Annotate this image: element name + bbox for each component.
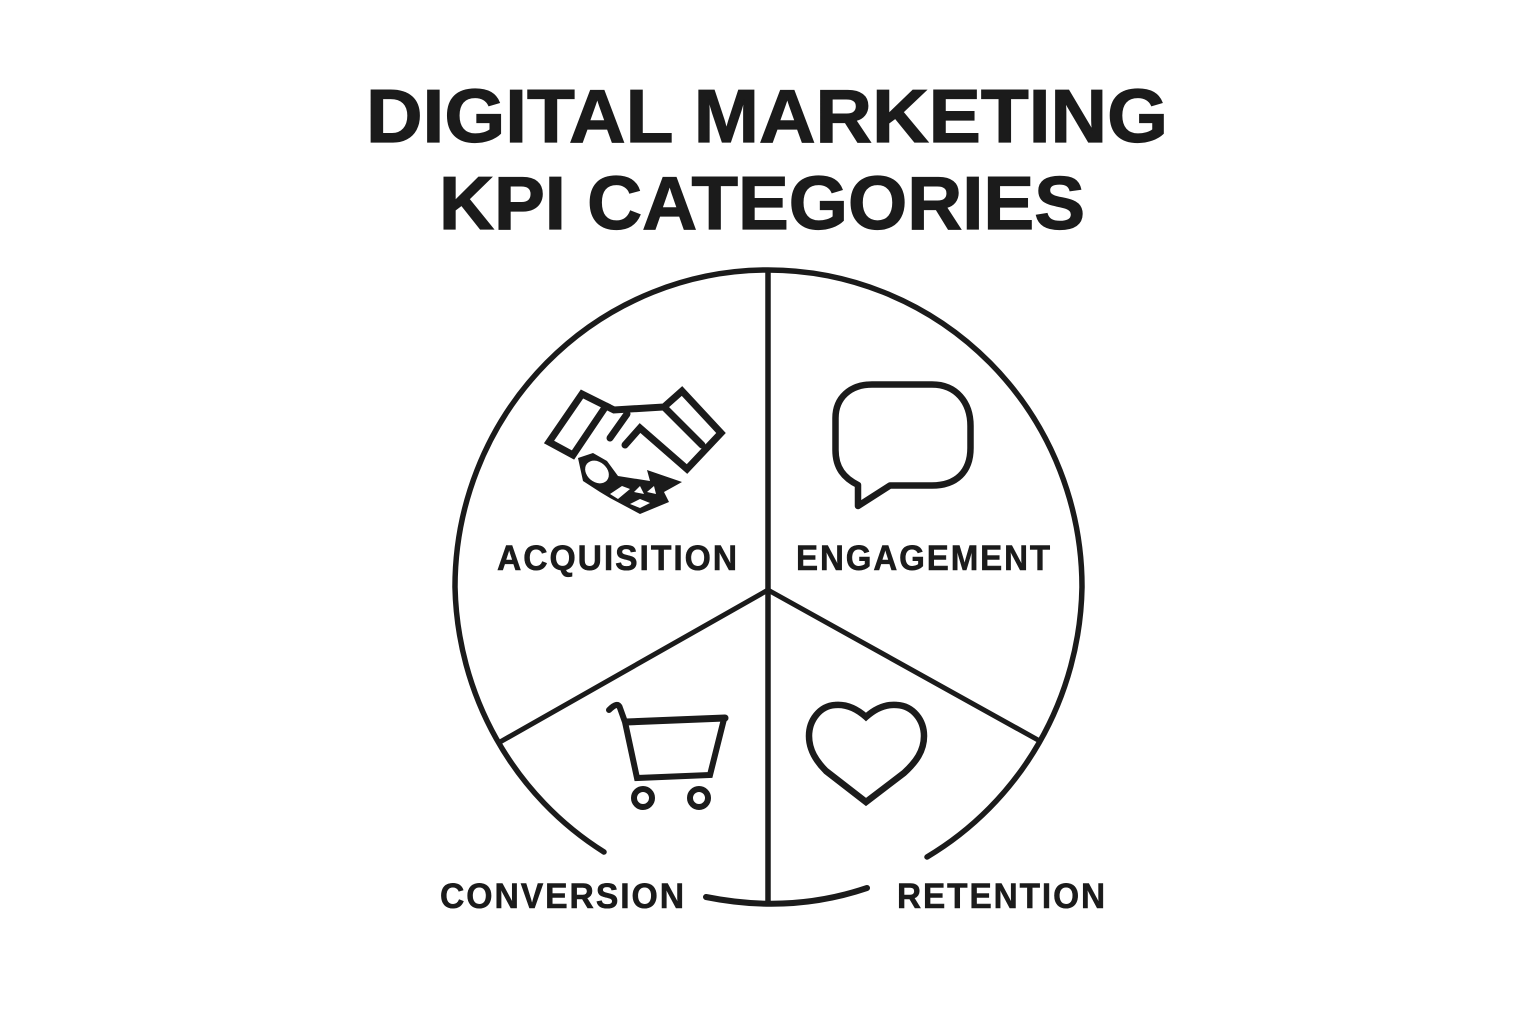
handshake finger gaps [581,456,656,508]
handshake lower hand [578,453,682,514]
segmented circle diagram [455,270,1082,904]
cart top bar [626,718,725,722]
bottom arc segment [706,888,867,904]
label: conversion: CONVERSION [440,877,686,916]
vertical divider [765,272,771,903]
cart handle and frame [609,705,724,778]
icon: heart [809,705,924,802]
label: retention: RETENTION [897,877,1107,916]
left divider [500,590,768,742]
title: DIGITAL MARKETING [366,74,1168,158]
icon: shopping cart [609,705,725,807]
right divider [768,590,1038,740]
cart wheels [634,789,708,807]
title [366,74,1168,245]
icon: speech bubble [836,384,970,506]
outer circle arc [455,270,1082,857]
icon: handshake [549,391,721,514]
label: acquisition: ACQUISITION [497,539,739,578]
handshake upper outline [549,391,721,469]
label: engagement: ENGAGEMENT [796,539,1052,578]
title: KPI CATEGORIES [439,161,1085,245]
